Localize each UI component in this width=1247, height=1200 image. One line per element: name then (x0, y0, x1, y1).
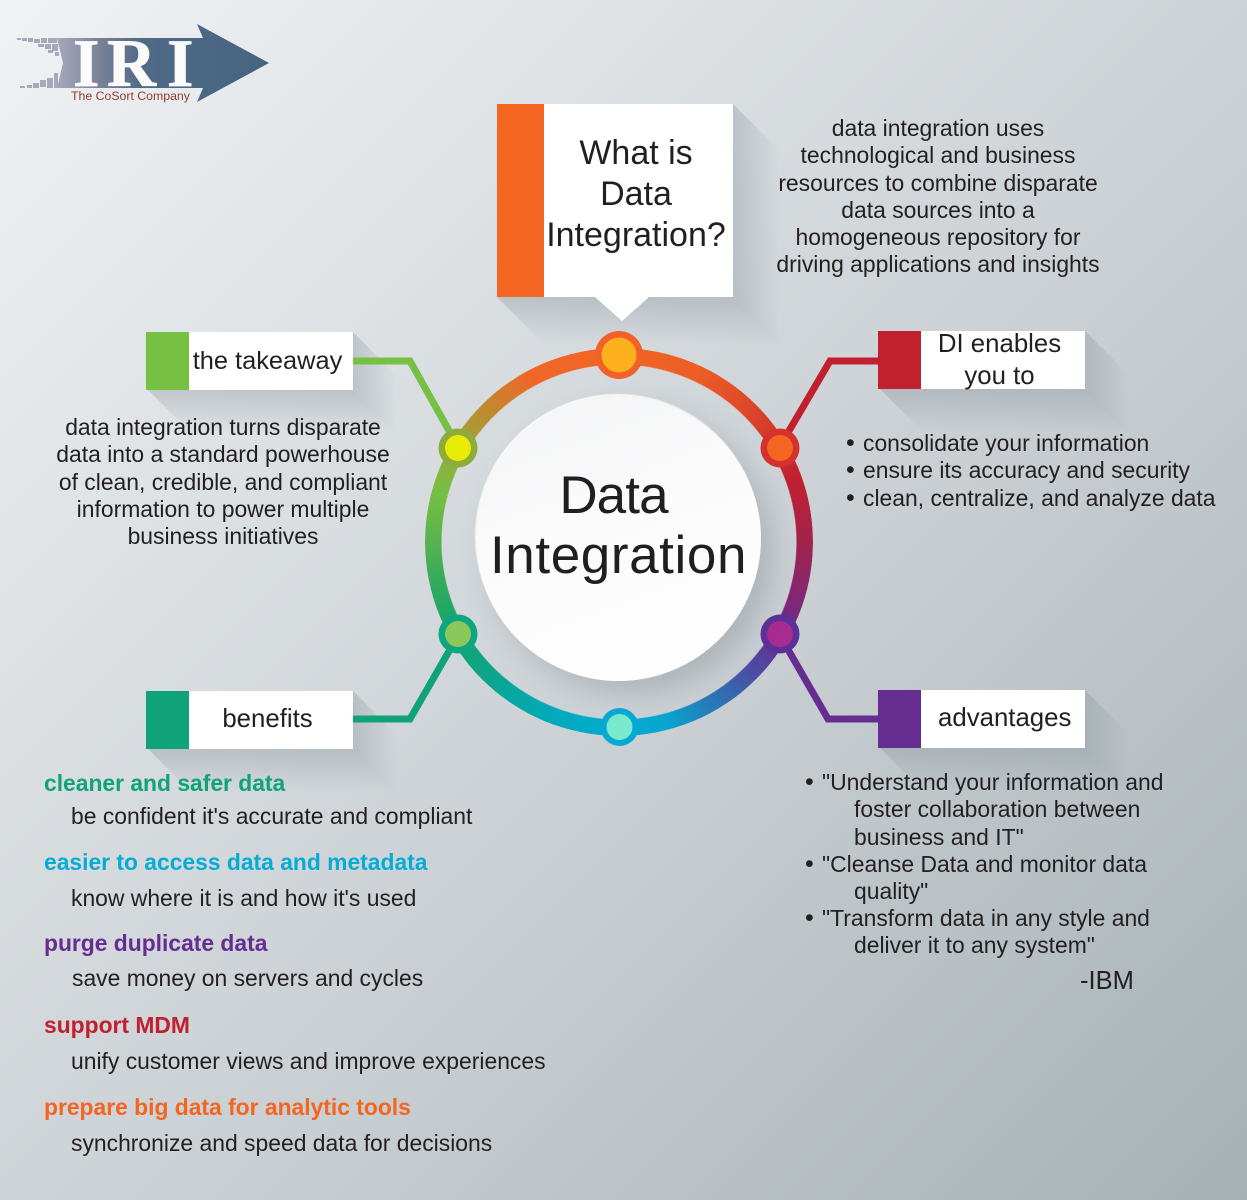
benefit: prepare big data (44, 1094, 492, 1156)
advantage 1: "Understand your information and (822, 769, 1164, 795)
callout heading: Integration? (546, 216, 726, 254)
node: upper right (760, 428, 800, 468)
connector: DI enables (786, 361, 880, 436)
advantage 1: • (805, 768, 814, 796)
benefit: support MDM: unify customer views and improve experiences (71, 1048, 546, 1074)
takeaway text: of clean, credible, and compliant (59, 469, 387, 495)
connector: advantages (786, 646, 880, 719)
takeaway text: information to power multiple (77, 496, 369, 522)
label: benefits (146, 691, 353, 749)
label: DI enables you to (878, 331, 1085, 389)
advantage 3: "Transform data in any style and (822, 905, 1150, 931)
logo: IRI The CoSort Company: The CoSort Company (71, 89, 191, 103)
callout heading (546, 134, 726, 254)
benefit: support MDM: support MDM (44, 1012, 190, 1038)
label: advantages: advantages (938, 704, 1071, 732)
benefit: prepare big data: synchronize and speed data for decisions (71, 1130, 492, 1156)
label: the takeaway (146, 332, 353, 390)
DI enables list: • (846, 429, 855, 457)
benefit: easier to access: easier to access data and metadata (44, 849, 427, 875)
callout heading: Data (600, 175, 672, 213)
benefit: cleaner and safer data (44, 770, 472, 829)
advantage 3 (805, 904, 1150, 958)
logo: IRI The CoSort Company: IRI (73, 25, 193, 101)
center title: Data (559, 466, 668, 525)
definition text: homogeneous repository for (795, 224, 1081, 250)
advantages list (805, 768, 1164, 958)
benefit: easier to access (44, 849, 428, 911)
advantage 2: quality" (854, 878, 928, 904)
DI enables list: clean, centralize, and analyze data (863, 485, 1216, 511)
benefit: cleaner and safer data: cleaner and safer data (44, 770, 285, 796)
takeaway text: business initiatives (128, 523, 318, 549)
advantage 2: • (805, 850, 814, 878)
callout heading: What is (579, 134, 693, 172)
advantage 3: deliver it to any system" (854, 932, 1095, 958)
advantage 2: "Cleanse Data and monitor data (822, 851, 1147, 877)
takeaway text: data into a standard powerhouse (56, 441, 390, 467)
node: lower left (438, 614, 478, 654)
label: benefits: benefits (222, 705, 313, 733)
ring: gradient circle (425, 348, 813, 736)
takeaway text: data integration turns disparate (65, 414, 381, 440)
benefit: support MDM (44, 1012, 546, 1074)
definition text: data integration uses (832, 115, 1044, 141)
advantage 1: foster collaboration between (854, 796, 1140, 822)
node: bottom (600, 708, 638, 746)
label: the takeaway: the takeaway (193, 347, 342, 375)
benefit: purge duplicate data (44, 930, 423, 991)
node: upper left (438, 428, 478, 468)
center title (490, 466, 747, 585)
advantage 1: business and IT" (854, 824, 1024, 850)
label: advantages (878, 690, 1085, 748)
advantage 1 (805, 768, 1164, 850)
connector: takeaway (353, 361, 452, 436)
definition text (776, 115, 1100, 277)
definition text: technological and business (801, 142, 1075, 168)
benefit: easier to access: know where it is and how it's used (71, 885, 416, 911)
benefit: purge duplicate data: save money on servers and cycles (72, 965, 423, 991)
connector: benefits (353, 646, 452, 719)
logo: IRI The CoSort Company (17, 24, 269, 103)
advantage 3: • (805, 904, 814, 932)
definition text: data sources into a (841, 197, 1035, 223)
attribution: IBM: -IBM (1080, 967, 1134, 995)
DI enables list: ensure its accuracy and security (863, 457, 1190, 483)
benefit: cleaner and safer data: be confident it's accurate and compliant (71, 803, 472, 829)
center title: Integration (490, 526, 747, 585)
callout: What is Data Integration? (497, 104, 733, 321)
center circle (476, 396, 761, 681)
advantage 2 (805, 850, 1147, 904)
DI enables list (846, 429, 1216, 512)
label: DI enables you to: DI enables (938, 330, 1061, 358)
benefit: prepare big data: prepare big data for analytic tools (44, 1094, 411, 1120)
node: top orange (595, 331, 643, 379)
DI enables list: consolidate your information (863, 430, 1149, 456)
definition text: resources to combine disparate (778, 170, 1098, 196)
label: DI enables you to: you to (964, 362, 1035, 390)
node: lower right (760, 614, 800, 654)
definition text: driving applications and insights (776, 251, 1100, 277)
DI enables list: • (846, 484, 855, 512)
benefit: purge duplicate data: purge duplicate data (44, 930, 267, 956)
DI enables list: • (846, 456, 855, 484)
takeaway text (56, 414, 390, 549)
